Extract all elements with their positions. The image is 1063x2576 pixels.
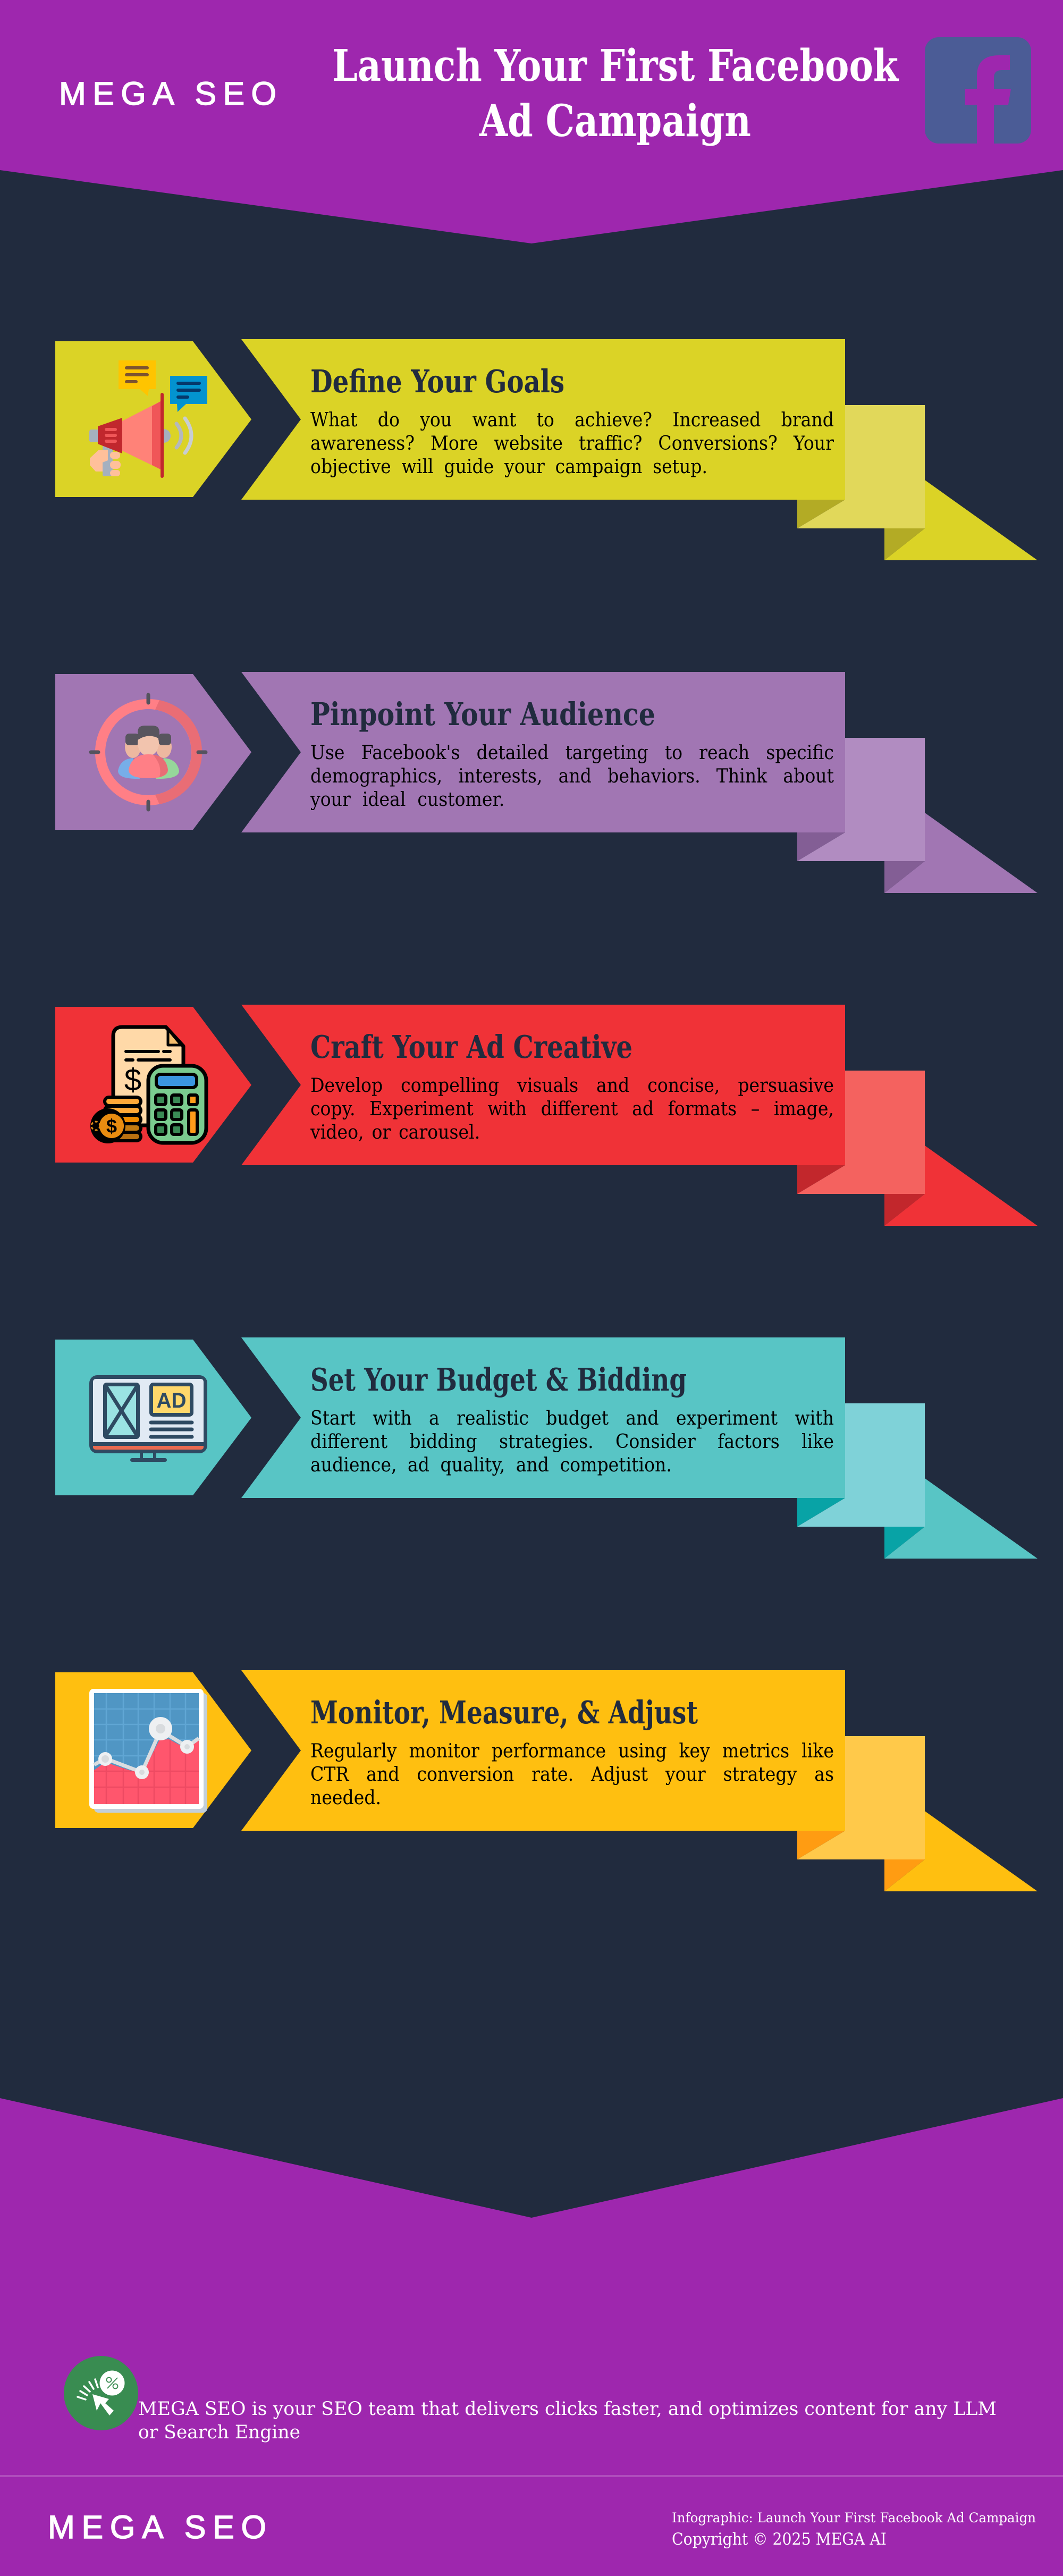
body text: different bidding strategies. Consider factors like xyxy=(310,1431,834,1453)
body text: Regularly monitor performance using key metrics like xyxy=(310,1740,834,1762)
icon: audience target xyxy=(91,695,206,810)
ribbon xyxy=(55,1337,1037,1559)
body text: needed. xyxy=(310,1787,381,1809)
icon: invoice, calculator and coins xyxy=(90,1027,206,1143)
ribbon xyxy=(55,1670,1037,1891)
source and copyright: Copyright © 2025 MEGA AI xyxy=(672,2530,887,2549)
body text xyxy=(310,1408,834,1476)
call to action text: MEGA SEO is your SEO team that delivers clicks faster, and optimizes content for any LLM xyxy=(138,2398,997,2420)
logo: MEGA SEO footer: MEGA SEO xyxy=(48,2509,266,2545)
source and copyright xyxy=(672,2510,1036,2549)
title: Launch Your First Facebook xyxy=(332,40,899,91)
body text xyxy=(310,1075,834,1143)
body text: copy. Experiment with different ad formats – image, xyxy=(310,1098,834,1120)
icon: megaphone xyxy=(89,360,207,478)
body text xyxy=(310,742,834,811)
ribbon xyxy=(55,1005,1037,1226)
heading: Craft Your Ad Creative xyxy=(310,1029,632,1065)
panel: step 5 monitor, measure and adjust xyxy=(55,1670,1037,1891)
body text: demographics, interests, and behaviors. Think about xyxy=(310,765,834,787)
body text xyxy=(310,409,834,478)
icon: monitor with ad xyxy=(89,1375,207,1462)
body text: audience, ad quality, and competition. xyxy=(310,1454,672,1476)
icon: invoice, calculator and coins: $ xyxy=(124,1063,141,1097)
panel: step 1 define your goals xyxy=(55,339,1037,560)
icon: invoice, calculator and coins: $ xyxy=(106,1115,117,1137)
panel: step 2 pinpoint your audience xyxy=(55,672,1037,893)
body text: your ideal customer. xyxy=(310,789,504,811)
ribbon xyxy=(55,672,1037,893)
title: Ad Campaign xyxy=(479,96,751,147)
panel: step 3 craft your ad creative xyxy=(55,1005,1037,1226)
header banner xyxy=(0,0,1063,243)
footer panel xyxy=(0,2098,1063,2576)
panel: step 4 set your budget and bidding xyxy=(55,1337,1037,1559)
body text: Start with a realistic budget and experiment with xyxy=(310,1408,834,1429)
body text: Use Facebook's detailed targeting to reach specific xyxy=(310,742,834,764)
logo: MEGA SEO: MEGA SEO xyxy=(59,75,276,112)
source and copyright: Infographic: Launch Your First Facebook Ad Campaign xyxy=(672,2510,1036,2526)
body text: awareness? More website traffic? Conversions? Your xyxy=(310,433,834,454)
heading: Define Your Goals xyxy=(310,363,564,400)
body text: What do you want to achieve? Increased brand xyxy=(310,409,834,431)
call to action text xyxy=(138,2398,997,2443)
body text: Develop compelling visuals and concise, persuasive xyxy=(310,1075,834,1097)
icon: click cursor with percent badge xyxy=(64,2356,138,2430)
icon: monitor with ad: AD xyxy=(156,1389,186,1412)
icon: facebook xyxy=(925,37,1031,144)
body text xyxy=(310,1740,834,1809)
ribbon xyxy=(55,339,1037,560)
title xyxy=(332,40,899,147)
call to action text: or Search Engine xyxy=(138,2422,300,2443)
body text: objective will guide your campaign setup. xyxy=(310,456,707,478)
heading: Set Your Budget & Bidding xyxy=(310,1361,687,1398)
icon: line chart xyxy=(89,1689,207,1813)
heading: Pinpoint Your Audience xyxy=(310,696,655,733)
heading: Monitor, Measure, & Adjust xyxy=(310,1694,698,1731)
body text: CTR and conversion rate. Adjust your strategy as xyxy=(310,1764,834,1786)
body text: video, or carousel. xyxy=(310,1122,480,1143)
